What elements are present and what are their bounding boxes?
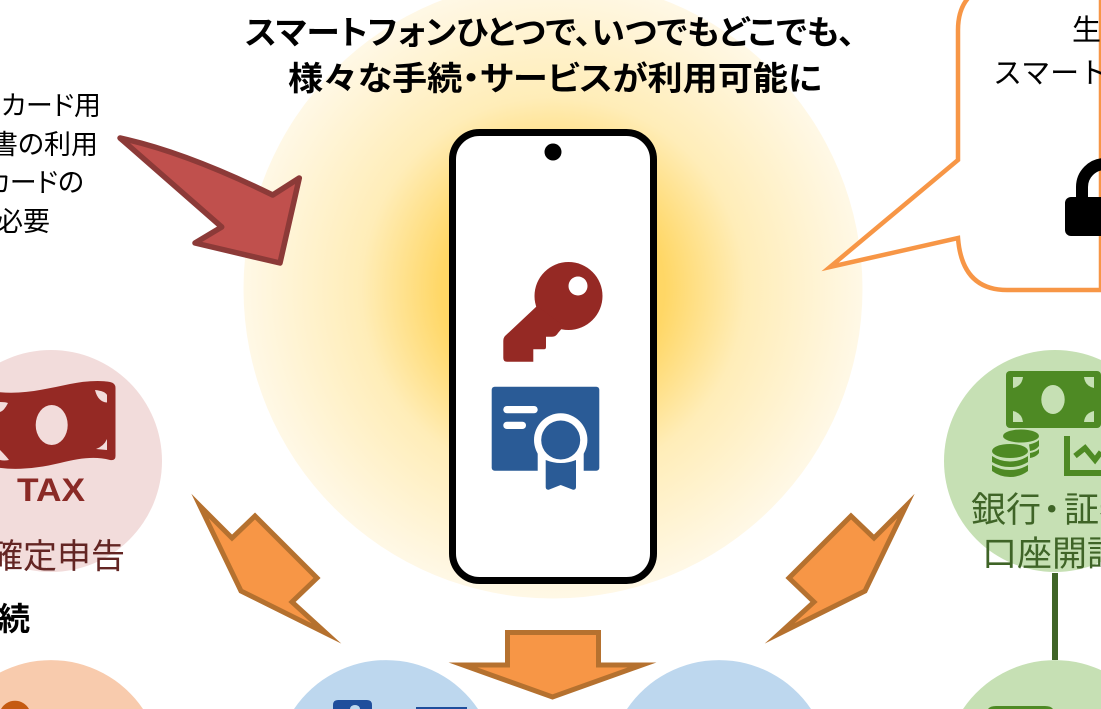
callout: biometric	[830, 0, 1101, 290]
icon: coins	[992, 430, 1039, 477]
icon: certificate	[492, 387, 599, 490]
label: bank and securities	[971, 491, 1101, 574]
arrow: center orange arrow	[463, 632, 642, 697]
panel: orange service circle	[0, 660, 143, 709]
phone	[452, 132, 654, 580]
connector line	[1052, 573, 1058, 660]
panel: blue service circle left	[294, 660, 478, 709]
title: スマートフォンひとつで、いつでもどこでも、	[245, 14, 855, 51]
label: bank and securities: 銀行	[971, 491, 1041, 530]
icon: document shapes	[333, 700, 467, 709]
arrow: right orange arrow	[780, 506, 906, 634]
icon: padlock	[1065, 164, 1101, 236]
text: callout message	[993, 14, 1101, 90]
label: bank and securities: ・	[1043, 491, 1061, 530]
glowing circle behind phone	[244, 0, 862, 598]
icon: key	[503, 262, 602, 362]
panel: green service circle lower	[963, 660, 1101, 709]
panel: tax return	[0, 350, 162, 576]
panel: blue service circle right	[627, 660, 811, 709]
arrow: red arrow toward phone	[120, 138, 299, 263]
icon: banknote	[0, 381, 116, 469]
icon: green banknote	[1006, 371, 1101, 428]
panel: bank and securities	[944, 350, 1101, 574]
title: 様々な手続・サービスが利用可能に	[288, 60, 822, 97]
title	[245, 14, 855, 97]
icon label: TAX: TAX	[17, 472, 86, 508]
arrow: left orange arrow	[200, 506, 326, 634]
icon: growth chart	[1067, 436, 1101, 473]
text: card requirement note	[0, 91, 101, 237]
